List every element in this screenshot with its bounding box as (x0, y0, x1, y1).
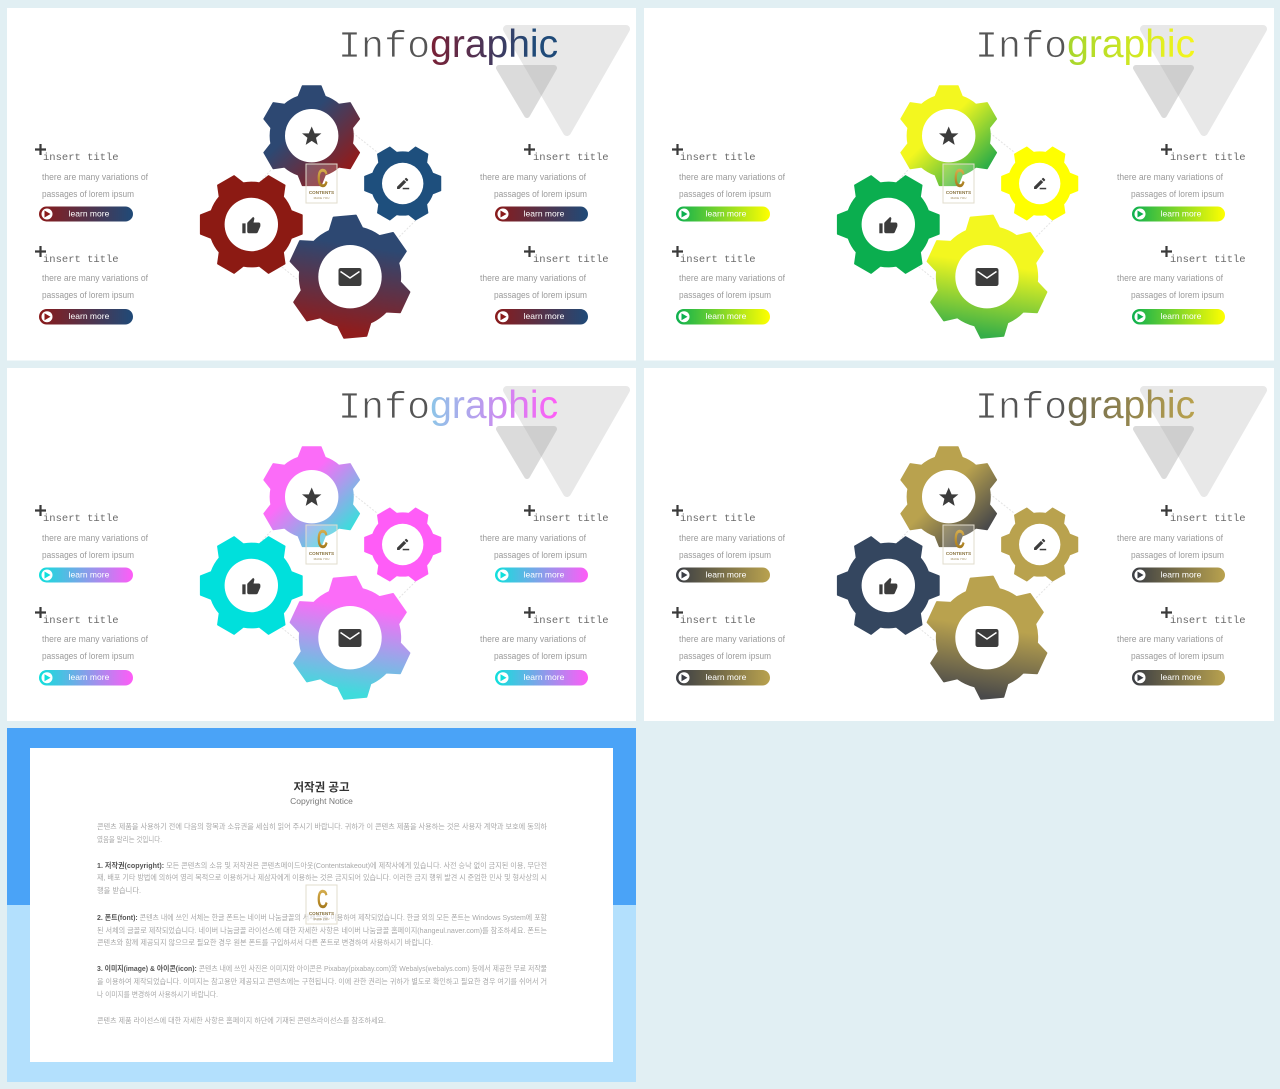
text block: right bottom: learn more (524, 311, 565, 321)
notice intro text: 콘텐츠 제품을 사용하기 전에 다음의 항목과 소유권을 세심히 읽어 주시기 바랍니다. 귀하가 이 콘텐츠 제품을 사용하는 것은 사용자 계약과 보호에 동의하 (97, 822, 547, 831)
watermark logo: CONTENTS (309, 190, 334, 195)
title: Infographic (338, 23, 558, 69)
watermark logo (943, 524, 974, 564)
notice section 3: image and icon: 3. 이미지(image) & 아이콘(icon): 콘텐츠 내에 쓰인 사진은 이미지와 아이콘은 Pixabay(pixabay.com)와 Webalys(webalys.com) 등에서 제공한 무료 저작물 (97, 964, 547, 973)
watermark logo: CONTENTS (309, 551, 334, 556)
text block: left top: there are many variations of (42, 533, 148, 544)
text block: left top (672, 144, 785, 222)
title: Infographic (975, 384, 1195, 430)
notice closing line: 콘텐츠 제품 라이선스에 대한 자세한 사항은 홈페이지 하단에 기재된 콘텐츠라이선스를 참조하세요. (97, 1016, 386, 1025)
text block: right top (480, 144, 609, 222)
text block: left bottom: insert title (680, 615, 756, 627)
watermark logo (306, 524, 337, 564)
watermark logo (306, 884, 337, 924)
gear: thumbs up (184, 517, 319, 654)
gear: mail (924, 212, 1050, 342)
text block: right bottom: insert title (1170, 615, 1246, 627)
text block: right bottom: passages of lorem ipsum (494, 651, 587, 662)
text block: right top (480, 505, 609, 582)
notice section 3: image and icon: 나 이미지를 변경하여 사용하시기 바랍니다. (97, 990, 218, 999)
text block: left top: learn more (706, 570, 747, 580)
notice section 2: font: 콘텐츠와 함께 제공되지 않으므로 필요한 경우 원본 폰트를 구입하셔서 다른 폰트로 변경하여 사용하시기 바랍니다. (97, 938, 433, 947)
text block: right bottom: passages of lorem ipsum (1131, 651, 1224, 662)
panel: copyright notice (7, 728, 636, 1082)
text block: left top: passages of lorem ipsum (42, 550, 134, 561)
watermark logo: CONTENTS (946, 551, 971, 556)
notice intro text (97, 822, 547, 844)
text block: right bottom: there are many variations of (480, 273, 586, 284)
text block: left top: insert title (43, 513, 119, 525)
text block: left bottom: learn more (706, 672, 747, 682)
text block: right bottom (480, 246, 609, 324)
text block: left bottom (35, 607, 148, 686)
panel: navy gold infographic (644, 368, 1274, 721)
watermark logo: MAKE YOU (314, 557, 329, 561)
notice section 1: copyright: 행을 받습니다. (97, 886, 141, 895)
notice section 1: copyright: 재, 배포 기타 방법에 의하여 영리 목적으로 이용하거나 제삼자에게 이용하는 것은 금지되어 있습니다. 이러한 금지 행위 발견 시 준엄한 민사 및 형사상의 시 (97, 873, 547, 882)
text block: right top: there are many variations of (1117, 533, 1223, 544)
gear: mail (287, 573, 413, 703)
text block: right top: insert title (533, 513, 609, 525)
watermark logo: C (954, 163, 965, 193)
notice subheading: Copyright Notice (290, 796, 353, 806)
text block: right top: passages of lorem ipsum (1131, 189, 1224, 200)
gear: pencil (989, 132, 1090, 235)
text block: right top: learn more (1161, 208, 1202, 218)
text block: right top: learn more (524, 570, 565, 580)
text block: right top: passages of lorem ipsum (494, 189, 587, 200)
text block: left top: learn more (69, 208, 110, 218)
text block: right bottom (1117, 607, 1246, 686)
text block: left bottom: passages of lorem ipsum (42, 651, 134, 662)
gear: pencil (352, 132, 453, 235)
text block: left bottom (35, 246, 148, 324)
watermark logo: C (317, 524, 328, 554)
watermark logo: CONTENTS (309, 911, 334, 916)
text block: right bottom: learn more (524, 672, 565, 682)
text block: right bottom: there are many variations of (480, 634, 586, 645)
connector lines (260, 494, 418, 641)
text block: right bottom: there are many variations of (1117, 273, 1223, 284)
title: Infographic (338, 384, 558, 430)
text block: left top: passages of lorem ipsum (42, 189, 134, 200)
watermark logo: CONTENTS (946, 190, 971, 195)
text block: left top (35, 144, 148, 222)
notice section 2: font: 된 서체의 글꼴로 제작되었습니다. 네이버 나눔글꼴 라이선스에 대한 자세한 사항은 네이버 나눔글꼴 홈페이지(hangeul.naver.com)를 참조하세요. 폰트는 (97, 926, 547, 935)
text block: right bottom: insert title (533, 615, 609, 627)
text block: left top: there are many variations of (679, 533, 785, 544)
text block: right bottom: there are many variations of (1117, 634, 1223, 645)
text block: right bottom: learn more (1161, 311, 1202, 321)
watermark logo: C (954, 524, 965, 554)
connector lines (897, 494, 1055, 641)
connector lines (260, 133, 418, 280)
text block: left bottom: learn more (69, 311, 110, 321)
gear: pencil (989, 493, 1090, 596)
text block: left top: there are many variations of (42, 172, 148, 183)
panel: green yellow infographic (644, 8, 1274, 360)
text block: left bottom (672, 607, 785, 686)
text block: right top: insert title (1170, 513, 1246, 525)
text block: left top: there are many variations of (679, 172, 785, 183)
text block: right top: passages of lorem ipsum (494, 550, 587, 561)
text block: right bottom: passages of lorem ipsum (494, 290, 587, 301)
gear: pencil (352, 493, 453, 596)
text block: left bottom: there are many variations of (42, 273, 148, 284)
text block: left top (672, 505, 785, 582)
gear: thumbs up (821, 517, 956, 654)
text block: right top: there are many variations of (1117, 172, 1223, 183)
connector lines (897, 133, 1055, 280)
decorative triangles (499, 390, 626, 493)
text block: left bottom: insert title (43, 254, 119, 266)
text block: left bottom: passages of lorem ipsum (679, 651, 771, 662)
text block: left bottom (672, 246, 785, 324)
text block: right top: there are many variations of (480, 172, 586, 183)
text block: right bottom: insert title (1170, 254, 1246, 266)
text block: left top: learn more (69, 570, 110, 580)
notice intro text: 였음을 알리는 것입니다. (97, 835, 162, 844)
text block: right top (1117, 505, 1246, 582)
text block: left top: passages of lorem ipsum (679, 189, 771, 200)
decorative triangles (1136, 29, 1263, 132)
gear: mail (924, 573, 1050, 703)
text block: right top: insert title (533, 152, 609, 164)
text block: left bottom: learn more (69, 672, 110, 682)
text block: left bottom: there are many variations of (679, 273, 785, 284)
text block: left bottom: insert title (680, 254, 756, 266)
text block: right top: passages of lorem ipsum (1131, 550, 1224, 561)
notice section 1: copyright (97, 861, 547, 895)
notice heading: 저작권 공고 (293, 780, 350, 794)
gear: mail (287, 212, 413, 342)
text block: right bottom: learn more (1161, 672, 1202, 682)
text block: right top: there are many variations of (480, 533, 586, 544)
notice section 3: image and icon (97, 964, 547, 999)
text block: left top (35, 505, 148, 582)
watermark logo: C (317, 884, 328, 914)
text block: left bottom: passages of lorem ipsum (42, 290, 134, 301)
text block: left top: insert title (680, 513, 756, 525)
notice section 2: font: 2. 폰트(font): 콘텐츠 내에 쓰인 서체는 한글 폰트는 네이버 나눔글꼴의 서체들을 이용하여 제작되었습니다. 한글 외의 모든 폰트는 Windows System에 포함 (97, 913, 547, 922)
text block: right top: learn more (1161, 570, 1202, 580)
decorative triangles (1136, 390, 1263, 493)
gear: thumbs up (821, 156, 956, 293)
text block: right bottom (480, 607, 609, 686)
text block: right top: insert title (1170, 152, 1246, 164)
text block: right top (1117, 144, 1246, 222)
notice section 2: font (97, 913, 547, 947)
decorative triangles (499, 29, 626, 132)
watermark logo: MAKE YOU (951, 196, 966, 200)
gear: thumbs up (184, 156, 319, 293)
text block: left bottom: insert title (43, 615, 119, 627)
watermark logo: MAKE YOU (314, 196, 329, 200)
notice section 3: image and icon: 을 이용하여 제작되었습니다. 이미지는 참고용만 제공되고 콘텐츠에는 구현됩니다. 이에 관한 권리는 귀하가 별도로 확인하고 필요한 경우 여기를 쉬어서 거 (97, 977, 547, 986)
gear: star (901, 447, 996, 546)
text block: left bottom: passages of lorem ipsum (679, 290, 771, 301)
text block: left bottom: learn more (706, 311, 747, 321)
text block: left top: passages of lorem ipsum (679, 550, 771, 561)
watermark logo: MAKE YOU (951, 557, 966, 561)
watermark logo: C (317, 163, 328, 193)
gear: star (264, 86, 359, 185)
text block: right top: learn more (524, 208, 565, 218)
text block: right bottom (1117, 246, 1246, 324)
text block: left bottom: there are many variations of (679, 634, 785, 645)
panel: cyan pink infographic (7, 368, 636, 721)
text block: left top: learn more (706, 208, 747, 218)
watermark logo (306, 163, 337, 203)
text block: left top: insert title (43, 152, 119, 164)
gear: star (264, 447, 359, 546)
watermark logo: MAKE YOU (314, 917, 329, 921)
gear: star (901, 86, 996, 185)
text block: right bottom: passages of lorem ipsum (1131, 290, 1224, 301)
text block: left bottom: there are many variations of (42, 634, 148, 645)
text block: right bottom: insert title (533, 254, 609, 266)
panel: maroon navy infographic (7, 8, 636, 360)
title: Infographic (975, 23, 1195, 69)
notice section 1: copyright: 1. 저작권(copyright): 모든 콘텐츠의 소유 및 저작권은 콘텐츠메이드아웃(Contentstakeout)에 제작사에게 있습니다. 사전 승낙 없이 금지된 이용, 무단전 (97, 861, 547, 870)
watermark logo (943, 163, 974, 203)
text block: left top: insert title (680, 152, 756, 164)
